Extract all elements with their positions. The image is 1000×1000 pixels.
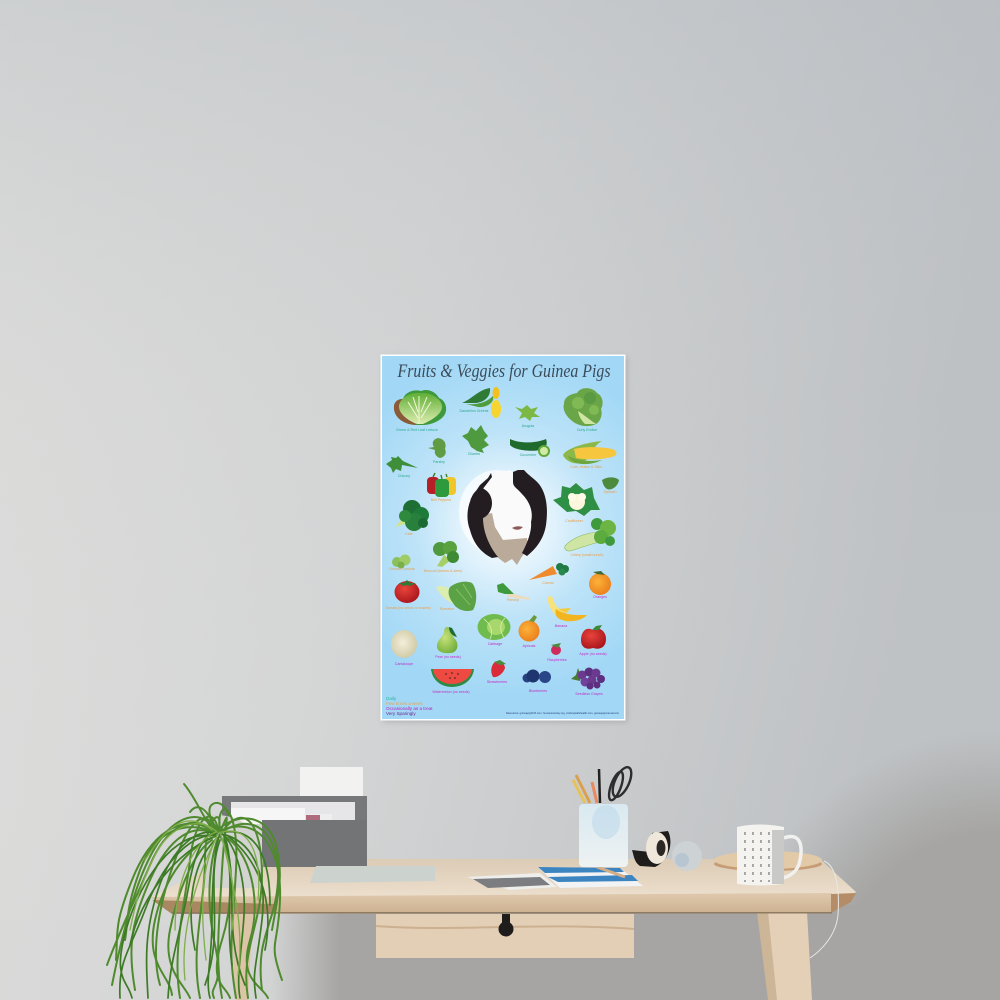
legend: Very Sparingly: [386, 711, 416, 716]
label: Arugula: [522, 424, 534, 428]
desk tray with papers: [222, 767, 367, 867]
label: Bell Peppers: [431, 498, 451, 502]
label: Blueberries: [529, 689, 547, 693]
icon: raspberries: [551, 643, 561, 655]
icon: cabbage: [478, 614, 510, 640]
icon: bell peppers: [427, 473, 456, 497]
drawer: [376, 914, 634, 958]
desk: [151, 859, 856, 1000]
label: Apricots: [523, 644, 536, 648]
label: Parsley: [433, 460, 445, 464]
icon: romaine: [436, 582, 476, 611]
icon: grapes: [571, 668, 605, 690]
label: Green & Red Leaf Lettuce: [396, 428, 438, 432]
label: Curly Endive: [577, 428, 597, 432]
wooden plate: [714, 851, 822, 871]
icon: apple: [581, 625, 606, 649]
icon: pear: [437, 627, 457, 653]
legend: Daily: [386, 696, 397, 701]
label: Cauliflower: [565, 519, 584, 523]
label: Corn, Husks & Silks: [570, 465, 602, 469]
label: Pear (no seeds): [435, 655, 461, 659]
icon: chicory: [386, 456, 418, 473]
label: Kale: [405, 532, 413, 536]
label: Banana: [555, 624, 567, 628]
icon: cantaloupe: [391, 630, 417, 658]
label: Cilantro: [468, 452, 480, 456]
desk top surface: [152, 859, 856, 897]
back legs: [757, 912, 778, 1000]
icon: cauliflower: [553, 483, 600, 516]
label: Strawberries: [487, 680, 507, 684]
label: Carrots: [542, 581, 554, 585]
label: Raspberries: [547, 658, 567, 662]
label: Watermelon (no seeds): [432, 690, 470, 694]
label: Brussel Sprouts: [389, 567, 415, 571]
icon: brussels sprouts: [392, 554, 410, 568]
icon: blueberries: [522, 670, 551, 683]
label: Spinach: [604, 490, 616, 494]
glass paperweight: [672, 841, 702, 871]
label: Apple (no seeds): [579, 652, 607, 656]
icon: spinach: [602, 477, 619, 489]
label: Chicory: [398, 474, 410, 478]
icon: arugula: [515, 405, 540, 421]
desk front edge: [151, 893, 832, 914]
icon: celery: [565, 518, 616, 551]
legend: [386, 696, 433, 716]
pen cup: [573, 765, 635, 867]
mug: [737, 824, 801, 886]
cable: [810, 861, 838, 958]
icon: corn: [563, 441, 616, 464]
label: Cabbage: [488, 642, 502, 646]
notebook: [538, 867, 643, 888]
label: Romaine: [440, 607, 454, 611]
poster: [380, 354, 627, 722]
label: Dandelion Greens: [460, 409, 489, 413]
icon: curly endive: [564, 388, 603, 426]
icon: banana: [547, 596, 587, 621]
plant: [107, 784, 282, 998]
label: Cucumber: [520, 453, 537, 457]
icon: kale: [395, 500, 429, 531]
label: Tomato (no seeds or leaves): [385, 606, 431, 610]
legend: Occasionally as a treat: [386, 706, 433, 711]
magazine: [310, 866, 435, 883]
label: Broccoli (leaves & stem): [424, 569, 462, 573]
label: Seedless Grapes: [575, 692, 603, 696]
tape dispenser: [632, 831, 670, 867]
resources note: Resources: guineapigSOS.com, humanesociety.org, vcahospitalshealth.com, guineapigmanual.com: [506, 711, 619, 715]
front leg: [768, 912, 812, 1000]
icon: parsnip: [497, 583, 530, 600]
label: Parsnip: [507, 598, 519, 602]
icon: oranges: [589, 571, 611, 595]
legend: Few times a week: [386, 701, 423, 706]
icon: lettuce: [394, 390, 446, 425]
icon: parsley: [428, 438, 446, 458]
icon: cilantro: [462, 425, 489, 453]
label: Celery (small bunch): [571, 553, 603, 557]
icon: watermelon: [431, 669, 474, 687]
icon: broccoli: [433, 541, 459, 567]
paper on desk: [467, 873, 557, 890]
icon: cucumber: [510, 439, 550, 457]
icon: dandelion greens: [462, 387, 501, 418]
label: Cantaloupe: [395, 662, 413, 666]
title: Fruits & Veggies for Guinea Pigs: [397, 361, 610, 382]
icon: tomato: [394, 580, 420, 603]
icon: guinea pig: [459, 470, 547, 565]
icon: strawberries: [491, 660, 506, 677]
label: Oranges: [593, 595, 607, 599]
icon: apricots: [518, 615, 540, 642]
icon: carrots: [529, 563, 569, 580]
